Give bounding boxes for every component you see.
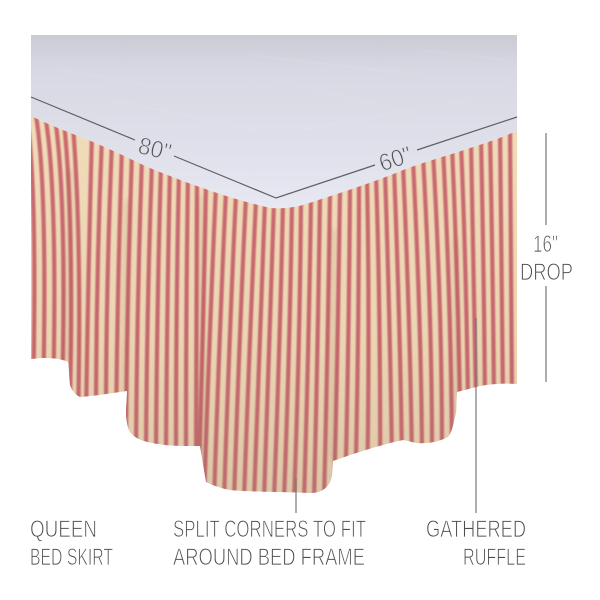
dimension line: 80 inch side <box>31 97 375 198</box>
dimension: 16 inch drop: DROP <box>520 259 573 286</box>
label: split corners to fit around bed frame: AROUND BED FRAME <box>173 544 365 571</box>
infographic: bed skirt dimensions diagram <box>30 35 572 565</box>
callout line: gathered ruffle <box>475 318 477 513</box>
panel: mattress top <box>31 35 517 208</box>
dimension: 16 inch drop <box>520 133 573 382</box>
dimension line: 60 inch side <box>417 117 517 150</box>
label: gathered ruffle: GATHERED <box>426 516 526 543</box>
label: queen bed skirt: BED SKIRT <box>30 544 113 571</box>
dimension: 16 inch drop: 16" <box>533 231 558 258</box>
panel: striped bed skirt fabric <box>31 116 517 493</box>
label: 80 inch: 80" <box>135 132 174 167</box>
label: queen bed skirt: QUEEN <box>30 516 97 543</box>
label: queen bed skirt <box>30 516 113 571</box>
label: gathered ruffle <box>426 516 526 571</box>
callout line: split corners <box>295 478 297 513</box>
label: gathered ruffle: RUFFLE <box>463 544 526 571</box>
label: split corners to fit around bed frame <box>173 516 366 571</box>
label: split corners to fit around bed frame: SPLIT CORNERS TO FIT <box>173 516 366 543</box>
label: 60 inch: 60" <box>376 141 415 177</box>
